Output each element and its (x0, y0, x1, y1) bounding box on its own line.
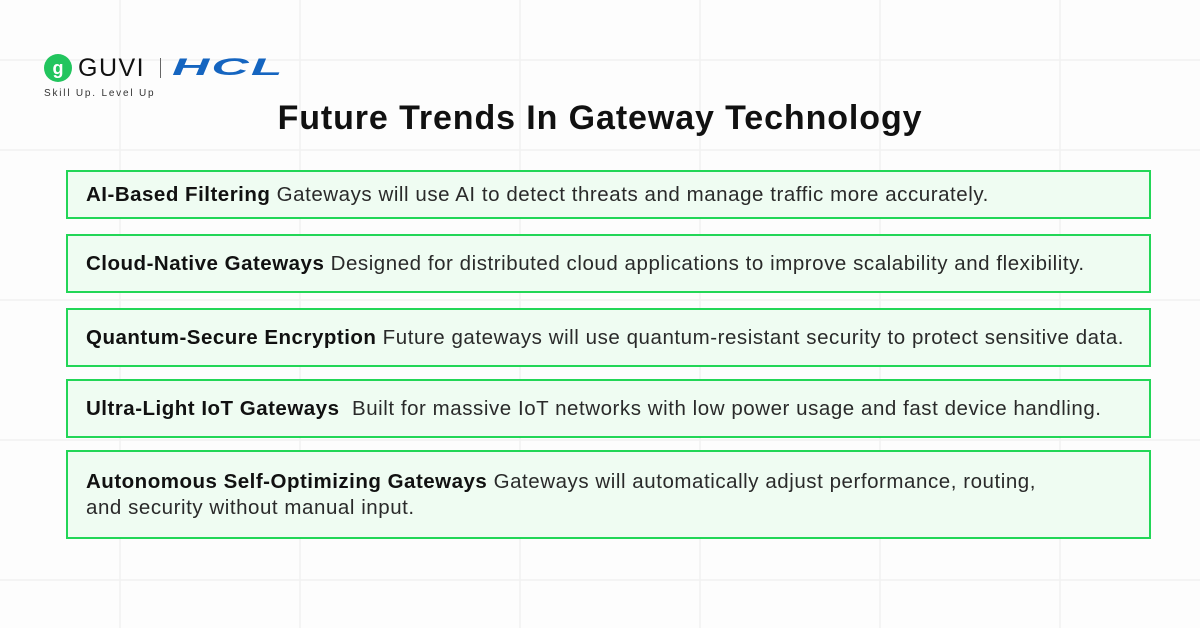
panel: iot: Ultra-Light IoT Gateways Built for massive IoT networks with low power usage and fast device handling. (86, 396, 1102, 420)
panel: cloud native (66, 234, 1151, 293)
title: Future Trends In Gateway Technology (278, 99, 922, 137)
panel: autonomous (66, 450, 1151, 539)
hcl text: HCL (172, 54, 285, 81)
panel: ai filtering: AI-Based Filtering Gateways will use AI to detect threats and manage traffic more accurately. (86, 182, 989, 206)
panel: quantum: Quantum-Secure Encryption Future gateways will use quantum-resistant security to protect sensitive data. (86, 326, 1124, 348)
tagline: Skill Up. Level Up (44, 88, 155, 99)
logo (44, 54, 285, 99)
icon: guvi: g (52, 58, 64, 78)
panel: quantum (66, 308, 1151, 367)
panel: autonomous: and security without manual input. (86, 496, 415, 519)
panel: autonomous: Autonomous Self-Optimizing Gateways Gateways will automatically adjust performance, routing, (86, 470, 1036, 493)
guvi text: GUVI (78, 54, 145, 82)
icon: guvi (44, 54, 72, 82)
panel: iot (66, 379, 1151, 438)
panel: cloud native: Cloud-Native Gateways Designed for distributed cloud applications to improve scalability and flexibility. (86, 252, 1085, 274)
panel: ai filtering (66, 170, 1151, 219)
